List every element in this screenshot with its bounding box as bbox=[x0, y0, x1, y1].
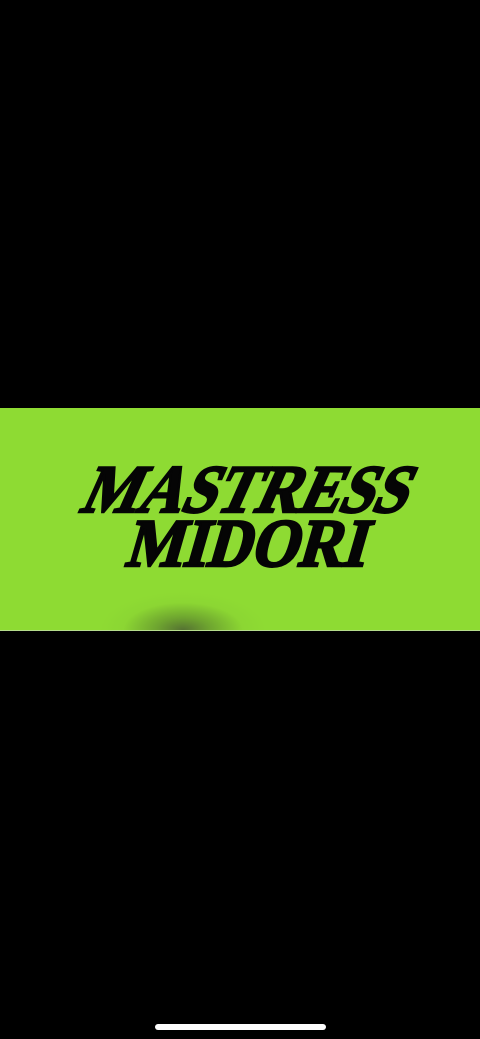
home indicator bar bbox=[155, 1024, 326, 1030]
panel: green banner bbox=[0, 408, 480, 631]
banner bottom edge highlight bbox=[0, 630, 480, 631]
title line: MIDORI: MIDORI bbox=[120, 506, 381, 582]
title line: MASTRESS: MASTRESS bbox=[71, 452, 430, 527]
logo wordmark bbox=[71, 452, 430, 582]
shadow at bottom of banner bbox=[100, 592, 266, 668]
